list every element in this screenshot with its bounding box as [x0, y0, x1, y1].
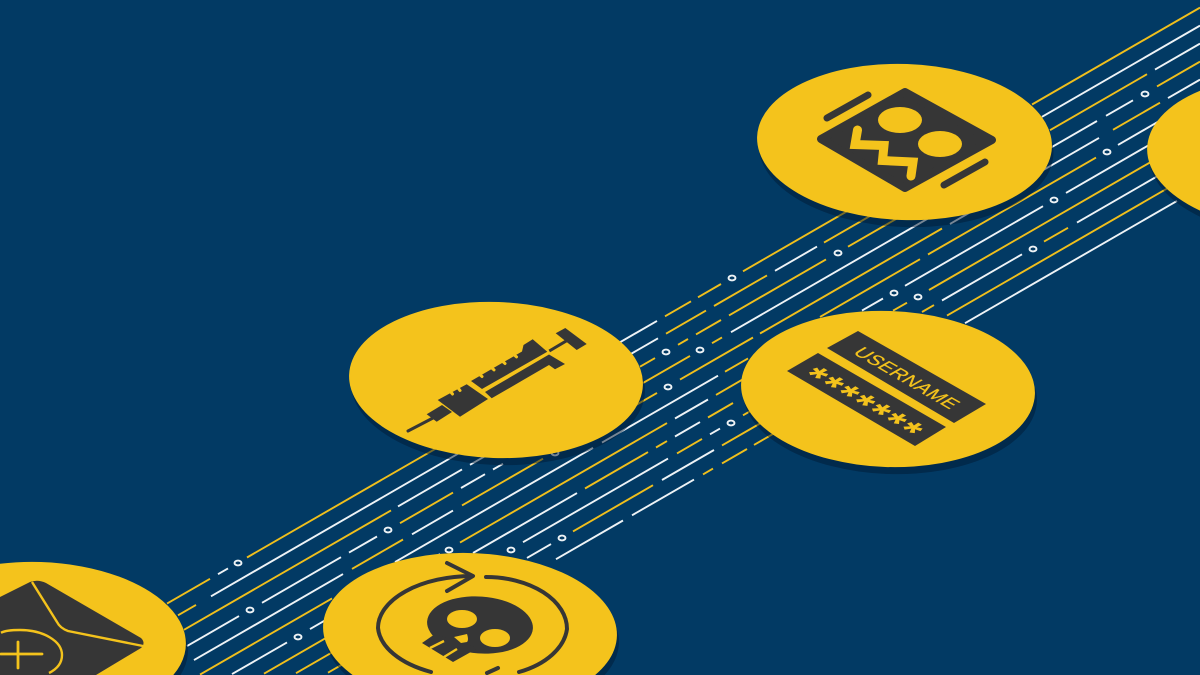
- icon: envelope with plus: [0, 581, 144, 675]
- disc: skull: [323, 553, 619, 675]
- data stream: small ring nodes: [234, 92, 1148, 639]
- disc: malware board: [754, 59, 1056, 232]
- icon: username field: [827, 331, 986, 423]
- disc: syringe: [346, 297, 648, 470]
- icon: circular arrows: [378, 563, 567, 673]
- disc: right edge: [1147, 91, 1200, 217]
- icon: skull: [422, 593, 535, 662]
- disc: envelope: [0, 562, 188, 675]
- icon: syringe: [408, 328, 587, 431]
- icon: password field: *******: [787, 361, 935, 447]
- icon: chip with circles and zigzag: [821, 92, 992, 188]
- disc: username and password: [738, 306, 1040, 479]
- icon: username field: USERNAME: [848, 344, 965, 412]
